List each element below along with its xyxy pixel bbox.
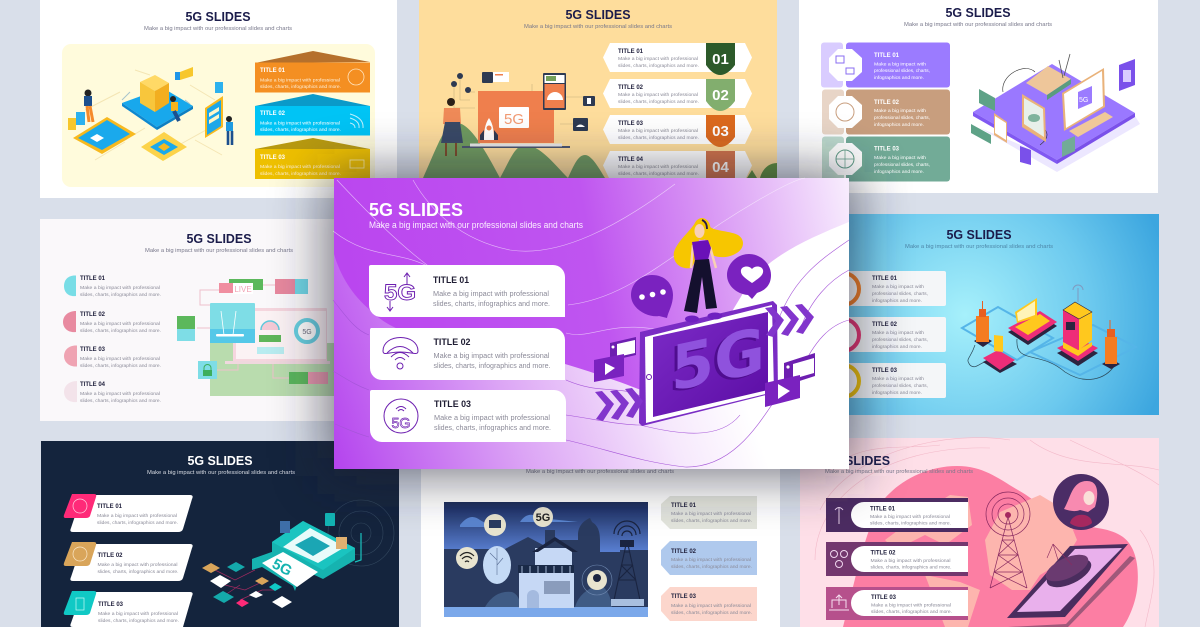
row 02: Make a big impact with professional [870, 558, 950, 563]
card 02: professional slides, charts, [872, 337, 928, 342]
slide subtitle: Make a big impact with our professional slides and charts [526, 469, 674, 475]
row 02: TITLE 02 [874, 99, 900, 106]
label 03: TITLE 03 [671, 593, 697, 600]
banner row: 02 [603, 79, 752, 111]
bubble: 5G: 5G [536, 512, 550, 524]
card 03: infographics and more. [872, 390, 922, 395]
item 04: Make a big impact with professional [80, 391, 160, 396]
banner: title 03 [255, 138, 370, 179]
banner row: 03: 03 [712, 123, 729, 140]
banner: title 01 [255, 51, 370, 92]
card 01 [827, 271, 946, 306]
plants [747, 163, 777, 178]
item 02: TITLE 02 [80, 311, 106, 318]
item 03: Make a big impact with professional [80, 356, 160, 361]
item 03: TITLE 03 [80, 346, 106, 353]
card 01: TITLE 01 [872, 275, 898, 282]
row 03: Make a big impact with professional [871, 602, 951, 608]
slide subtitle: Make a big impact with our professional slides and charts [145, 248, 293, 254]
banner: title 03: slides, charts, infographics and more. [260, 171, 341, 176]
slide: blue right [827, 214, 1159, 415]
row 02: infographics and more. [874, 122, 924, 127]
row 01: TITLE 01 [870, 506, 896, 512]
slide subtitle: Make a big impact with our professional slides and charts [825, 469, 973, 475]
banner: title 02: slides, charts, infographics and more. [260, 127, 341, 132]
row 03: TITLE 03 [874, 146, 900, 152]
card: title 01: slides, charts, infographics and more. [433, 301, 550, 308]
label 01: slides, charts, infographics and more. [671, 518, 752, 523]
slide subtitle: Make a big impact with our professional slides and charts [144, 26, 292, 32]
card 01 [64, 494, 193, 532]
monitor: 5G [1079, 97, 1088, 104]
monitor dashboard: 5G [302, 329, 312, 336]
row 03: TITLE 03 [871, 594, 897, 601]
white wave [728, 222, 849, 430]
item 01: Make a big impact with professional [80, 285, 160, 290]
row 01 [821, 42, 950, 88]
isometric devices illustration [971, 54, 1140, 172]
card 03: Make a big impact with professional [98, 611, 178, 616]
cell tower [611, 521, 644, 606]
banner row: 04: 04 [712, 159, 729, 176]
small device block [983, 335, 1017, 373]
isometric illustration: cube and platform [122, 75, 193, 130]
pink blob [843, 466, 1138, 627]
icon: 5G circle [384, 399, 418, 433]
slide title: 5G SLIDES [186, 231, 252, 246]
slide title: 5G SLIDES [566, 7, 631, 22]
left tower [974, 301, 992, 347]
card 02: TITLE 02 [872, 321, 898, 328]
banner row: 01: 01 [712, 51, 729, 68]
banner: title 03: Make a big impact with professional [260, 164, 340, 169]
small phone [994, 113, 1007, 143]
item 04: slides, charts, infographics and more. [80, 398, 161, 403]
row 01: TITLE 01 [874, 52, 900, 59]
isometric illustration: phone [68, 67, 223, 138]
slide title: 5G SLIDES [188, 453, 253, 468]
row 03: infographics and more. [874, 169, 924, 174]
isometric 5G device illustration [202, 500, 394, 608]
bubble: 5G [533, 507, 553, 527]
item 02: slides, charts, infographics and more. [80, 328, 161, 333]
banner row: 03: slides, charts, infographics and more. [618, 135, 699, 140]
icon: wifi [383, 338, 418, 369]
slide subtitle: Make a big impact with our professional slides and charts [524, 24, 672, 30]
woman standing on tablet [674, 218, 743, 322]
card 01: slides, charts, infographics and more. [97, 520, 178, 525]
row 01 [826, 498, 968, 532]
card: title 02: Make a big impact with professional [434, 353, 550, 360]
chevrons left [595, 388, 643, 421]
banner row: 02: slides, charts, infographics and more. [618, 99, 699, 104]
house [518, 537, 578, 608]
video cards left [594, 337, 636, 382]
banner row: 03: TITLE 03 [618, 120, 644, 127]
slide subtitle: Make a big impact with our professional slides and charts [147, 470, 295, 476]
icon: 5G with arrows: 5G [384, 280, 416, 305]
slide title: 5G SLIDES [825, 453, 890, 468]
tablet with 5G: 5G [668, 316, 762, 408]
card 01: Make a big impact with professional [97, 513, 177, 518]
card 02: Make a big impact with professional [98, 562, 178, 567]
row 03: Make a big impact with [874, 155, 926, 160]
card: title 02: TITLE 02 [434, 337, 470, 348]
banner row: 04: Make a big impact with professional [618, 164, 698, 169]
item 02 [63, 311, 161, 333]
card: title 03: TITLE 03 [434, 399, 471, 410]
row 01: Make a big impact with [874, 62, 926, 66]
main purple slide [333, 178, 849, 469]
row 03 [826, 587, 968, 620]
avatar [582, 565, 612, 595]
row 01: professional slides, charts, [874, 68, 930, 73]
card 03 [827, 363, 946, 398]
row 02: Make a big impact with [874, 108, 926, 113]
card 02: Make a big impact with [872, 330, 924, 335]
row 01: slides, charts, infographics and more. [870, 520, 951, 526]
card: title 02: slides, charts, infographics and more. [434, 363, 551, 370]
laptop with 5G [462, 91, 570, 148]
slide title: 5G SLIDES [946, 227, 1012, 242]
night scene [444, 502, 648, 617]
main subtitle: Make a big impact with our professional slides and charts [369, 220, 583, 230]
banner: title 01: Make a big impact with professional [260, 78, 340, 82]
card 02 [827, 317, 946, 352]
label 02: slides, charts, infographics and more. [671, 564, 752, 569]
icon: 5G circle: 5G [392, 415, 410, 432]
slide: dark navy bottom left [41, 441, 399, 627]
card 02: slides, charts, infographics and more. [98, 569, 178, 574]
isometric illustration: tablet [73, 117, 136, 154]
label 02: TITLE 02 [671, 548, 697, 555]
banner: title 02: TITLE 02 [260, 110, 286, 117]
card 01: professional slides, charts, [872, 291, 928, 296]
label 02 [661, 541, 757, 575]
monitor [1062, 68, 1113, 137]
banner: title 01: TITLE 01 [260, 67, 286, 74]
isometric 5G device illustration: 5G [269, 556, 295, 580]
row 02: professional slides, charts, [874, 115, 930, 120]
world map [885, 495, 1077, 627]
tablet with 5G [639, 301, 778, 426]
row 01: infographics and more. [874, 75, 924, 80]
banner: title 01: slides, charts, infographics and more. [260, 84, 341, 89]
card: title 01: TITLE 01 [433, 275, 470, 286]
slide: yellow top left [40, 0, 397, 198]
card: title 03: slides, charts, infographics and more. [434, 425, 551, 432]
avatar [1053, 474, 1109, 530]
laptop with 5G: 5G [504, 111, 524, 128]
banner row: 04 [603, 151, 752, 180]
center slide shadow [326, 172, 856, 476]
heart bubble [727, 254, 771, 299]
card 03: Make a big impact with [872, 376, 924, 381]
banner row: 03 [603, 115, 752, 147]
card 02: infographics and more. [872, 344, 922, 349]
phone and dish [1007, 544, 1135, 627]
item 03: slides, charts, infographics and more. [80, 363, 161, 368]
item 04: TITLE 04 [80, 381, 106, 388]
slide: night city bottom middle [421, 468, 780, 627]
slide subtitle: Make a big impact with our professional slides and charts [904, 22, 1052, 28]
slide title: 5G SLIDES [946, 5, 1011, 20]
row 03: slides, charts, infographics and more. [871, 609, 952, 614]
label 03 [661, 587, 757, 621]
big building [1057, 285, 1098, 366]
isometric illustration: chip [141, 132, 187, 161]
floating tiles [202, 513, 347, 608]
item 04 [64, 381, 161, 403]
row 01: Make a big impact with professional [870, 514, 950, 519]
woman figure [441, 98, 463, 156]
banner row: 02: 02 [712, 87, 729, 104]
purple gradient wave [334, 178, 849, 395]
router card [210, 303, 255, 343]
right tower [1102, 320, 1120, 369]
video cards right [765, 353, 815, 407]
item 01: slides, charts, infographics and more. [80, 292, 161, 297]
card 03: slides, charts, infographics and more. [98, 618, 179, 623]
item 02: Make a big impact with professional [80, 321, 160, 326]
card 02 [64, 542, 193, 581]
card 03 [64, 591, 193, 627]
card: title 02 [370, 328, 565, 380]
chat bubble [631, 275, 673, 318]
card: title 01 [369, 265, 565, 317]
main title: 5G SLIDES [369, 199, 463, 220]
card: title 03: Make a big impact with professional [434, 415, 550, 422]
banner row: 01 [603, 43, 752, 75]
slide subtitle: Make a big impact with our professional slides and charts [905, 244, 1053, 250]
label 01 [661, 496, 757, 529]
card 01: Make a big impact with [872, 284, 924, 289]
monitor dashboard [225, 308, 330, 364]
bubble: wifi [456, 547, 478, 569]
router [1026, 54, 1071, 100]
item 01: TITLE 01 [80, 275, 106, 282]
card: title 01: Make a big impact with professional [433, 291, 549, 298]
banner row: 03: Make a big impact with professional [618, 128, 698, 133]
small status tiles [177, 279, 328, 384]
row 03: professional slides, charts, [874, 162, 930, 167]
card 03: TITLE 03 [98, 601, 124, 608]
row 02 [826, 542, 968, 576]
card 03: professional slides, charts, [872, 383, 928, 388]
banner: title 02 [255, 94, 370, 136]
chevrons right [765, 304, 814, 337]
slide: white purple top right [799, 0, 1158, 193]
row 02 [822, 90, 950, 134]
banner row: 02: TITLE 02 [618, 84, 644, 91]
small status tiles: LIVE [234, 285, 252, 294]
item 01 [64, 275, 161, 297]
label 01: TITLE 01 [671, 502, 697, 509]
banner row: 04: TITLE 04 [618, 156, 644, 163]
label 03: Make a big impact with professional [671, 603, 751, 608]
signal tower [986, 492, 1030, 588]
small tags [971, 59, 1135, 165]
yellow panel [62, 44, 375, 187]
gauge tablet [543, 73, 566, 110]
tablet with 5G: 5G [671, 314, 765, 406]
hills [423, 123, 605, 178]
card: title 03 [370, 390, 566, 442]
banner row: 01: TITLE 01 [618, 48, 644, 55]
card 01: TITLE 01 [97, 503, 123, 510]
tree [483, 546, 511, 584]
banner: title 03: TITLE 03 [260, 154, 286, 161]
row 02: slides, charts, infographics and more. [870, 564, 952, 570]
slide: orange top middle [419, 0, 777, 180]
banner row: 01: slides, charts, infographics and more. [618, 63, 699, 68]
banner row: 04: slides, charts, infographics and more. [618, 171, 699, 176]
icon: 5G with arrows [384, 273, 416, 311]
banner row: 02: Make a big impact with professional [618, 92, 698, 97]
slide: white with pink green left [40, 219, 350, 421]
people [84, 90, 233, 145]
banner row: 01: Make a big impact with professional [618, 56, 698, 61]
label 01: Make a big impact with professional [671, 511, 751, 516]
connected icons [451, 72, 595, 131]
network illustration [177, 279, 335, 396]
label 03: slides, charts, infographics and more. [671, 610, 752, 615]
card 02: TITLE 02 [98, 552, 123, 559]
bubble: laptop [484, 514, 506, 536]
row 03 [822, 136, 950, 182]
banner: title 02: Make a big impact with professional [260, 120, 340, 126]
laptop block [1008, 298, 1057, 345]
item 03 [64, 345, 161, 368]
card 03: TITLE 03 [872, 367, 898, 374]
label 02: Make a big impact with professional [671, 557, 751, 562]
tablet [1022, 94, 1046, 142]
card 01: infographics and more. [872, 298, 922, 303]
slide: pink bottom right [800, 438, 1159, 627]
slide title: 5G SLIDES [186, 9, 251, 24]
row 02: TITLE 02 [870, 550, 896, 556]
isometric city illustration [962, 285, 1136, 379]
